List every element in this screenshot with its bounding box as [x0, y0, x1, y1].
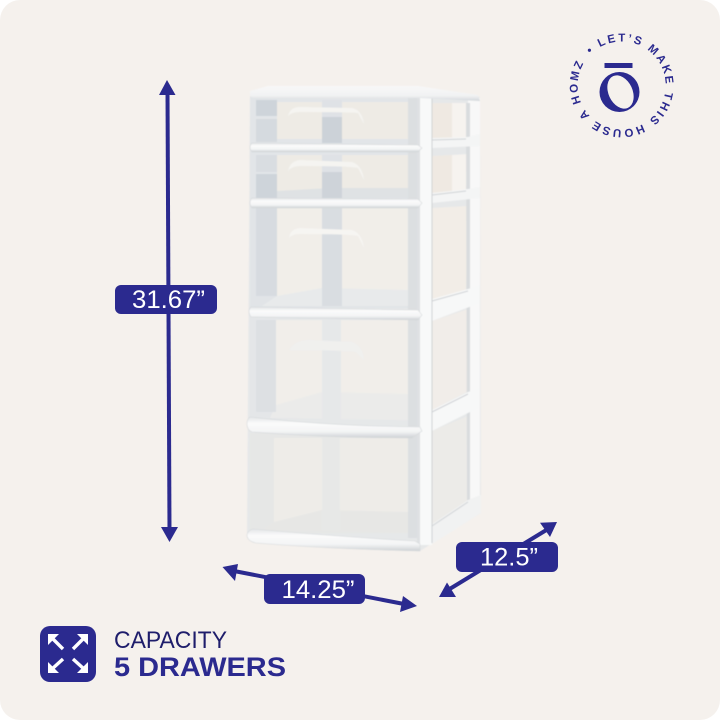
height label: 31.67”	[132, 286, 205, 314]
depth label	[456, 542, 558, 572]
product photo: five drawer storage unit	[247, 86, 481, 551]
capacity value: 5 DRAWERS	[114, 652, 286, 682]
drawer rims	[247, 143, 422, 551]
logo letter o	[600, 72, 640, 112]
drawer 2	[250, 151, 418, 199]
drawer 3	[250, 206, 418, 308]
circular slogan: • LET’S MAKE THIS HOUSE A HOMZ	[570, 34, 674, 138]
unit body	[247, 92, 481, 551]
drawer 1	[250, 97, 418, 144]
white front posts	[408, 98, 432, 545]
width label: 14.25”	[282, 576, 354, 604]
drawer 5	[250, 433, 418, 533]
capacity label: CAPACITY	[114, 627, 227, 654]
right side panels	[432, 98, 481, 544]
capacity icon	[40, 626, 96, 682]
brand logo badge	[570, 34, 674, 138]
logo bar	[604, 63, 632, 68]
top lid	[250, 86, 480, 101]
width label	[264, 574, 365, 604]
width arrow	[222, 564, 417, 612]
height arrow	[159, 80, 178, 542]
depth label: 12.5”	[480, 544, 538, 572]
depth arrow	[439, 522, 557, 597]
height label	[115, 285, 217, 314]
drawer 4	[250, 316, 418, 420]
